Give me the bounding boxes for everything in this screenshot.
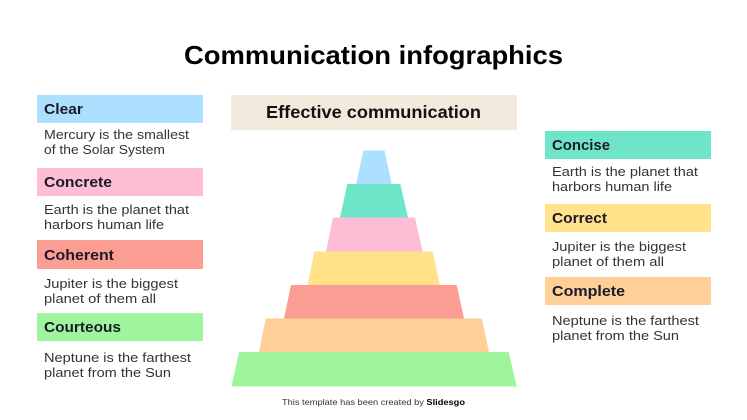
concrete heading: Concrete <box>44 174 112 191</box>
layer: pink <box>326 218 422 252</box>
panel: complete <box>545 277 711 343</box>
panel: coherent <box>37 240 203 306</box>
clear text <box>44 127 189 157</box>
courteous text: planet from the Sun <box>44 365 171 380</box>
pyramid heading: Effective communication <box>266 102 481 122</box>
panel: correct <box>545 204 711 269</box>
title: Communication infographics <box>184 40 563 70</box>
layer: yellow <box>308 252 440 285</box>
complete heading <box>545 277 711 305</box>
correct text: planet of them all <box>552 254 664 269</box>
concise heading <box>545 131 711 159</box>
concise text: harbors human life <box>552 179 672 194</box>
correct heading: Correct <box>552 210 607 227</box>
clear text: of the Solar System <box>44 142 165 157</box>
concrete text <box>44 202 189 232</box>
correct heading <box>545 204 711 232</box>
courteous text <box>44 350 191 380</box>
correct text <box>552 239 686 269</box>
courteous heading <box>37 313 203 341</box>
panel: concise <box>545 131 711 194</box>
clear heading <box>37 95 203 123</box>
panel: concrete <box>37 168 203 232</box>
concise heading: Concise <box>552 137 610 154</box>
pyramid heading <box>231 95 517 130</box>
concrete text: harbors human life <box>44 217 164 232</box>
pyramid chart <box>232 150 517 386</box>
coherent text <box>44 276 178 306</box>
courteous text: Neptune is the farthest <box>44 350 191 365</box>
complete heading: Complete <box>552 283 625 300</box>
coherent heading: Coherent <box>44 247 114 264</box>
layer: orange <box>259 318 489 352</box>
coherent text: planet of them all <box>44 291 156 306</box>
concise text <box>552 164 698 194</box>
complete text <box>552 313 699 343</box>
coherent text: Jupiter is the biggest <box>44 276 178 291</box>
layer: blue <box>356 150 392 184</box>
concise text: Earth is the planet that <box>552 164 698 179</box>
layer: teal <box>340 184 408 218</box>
panel: clear <box>37 95 203 157</box>
panel: courteous <box>37 313 203 380</box>
courteous heading: Courteous <box>44 319 121 336</box>
clear heading: Clear <box>44 101 83 118</box>
concrete heading <box>37 168 203 196</box>
clear text: Mercury is the smallest <box>44 127 189 142</box>
complete text: Neptune is the farthest <box>552 313 699 328</box>
layer: green <box>232 352 517 386</box>
layer: red <box>284 285 464 318</box>
complete text: planet from the Sun <box>552 328 679 343</box>
correct text: Jupiter is the biggest <box>552 239 686 254</box>
footer credit: This template has been created by Slidesgo <box>282 397 465 407</box>
coherent heading <box>37 240 203 269</box>
concrete text: Earth is the planet that <box>44 202 189 217</box>
